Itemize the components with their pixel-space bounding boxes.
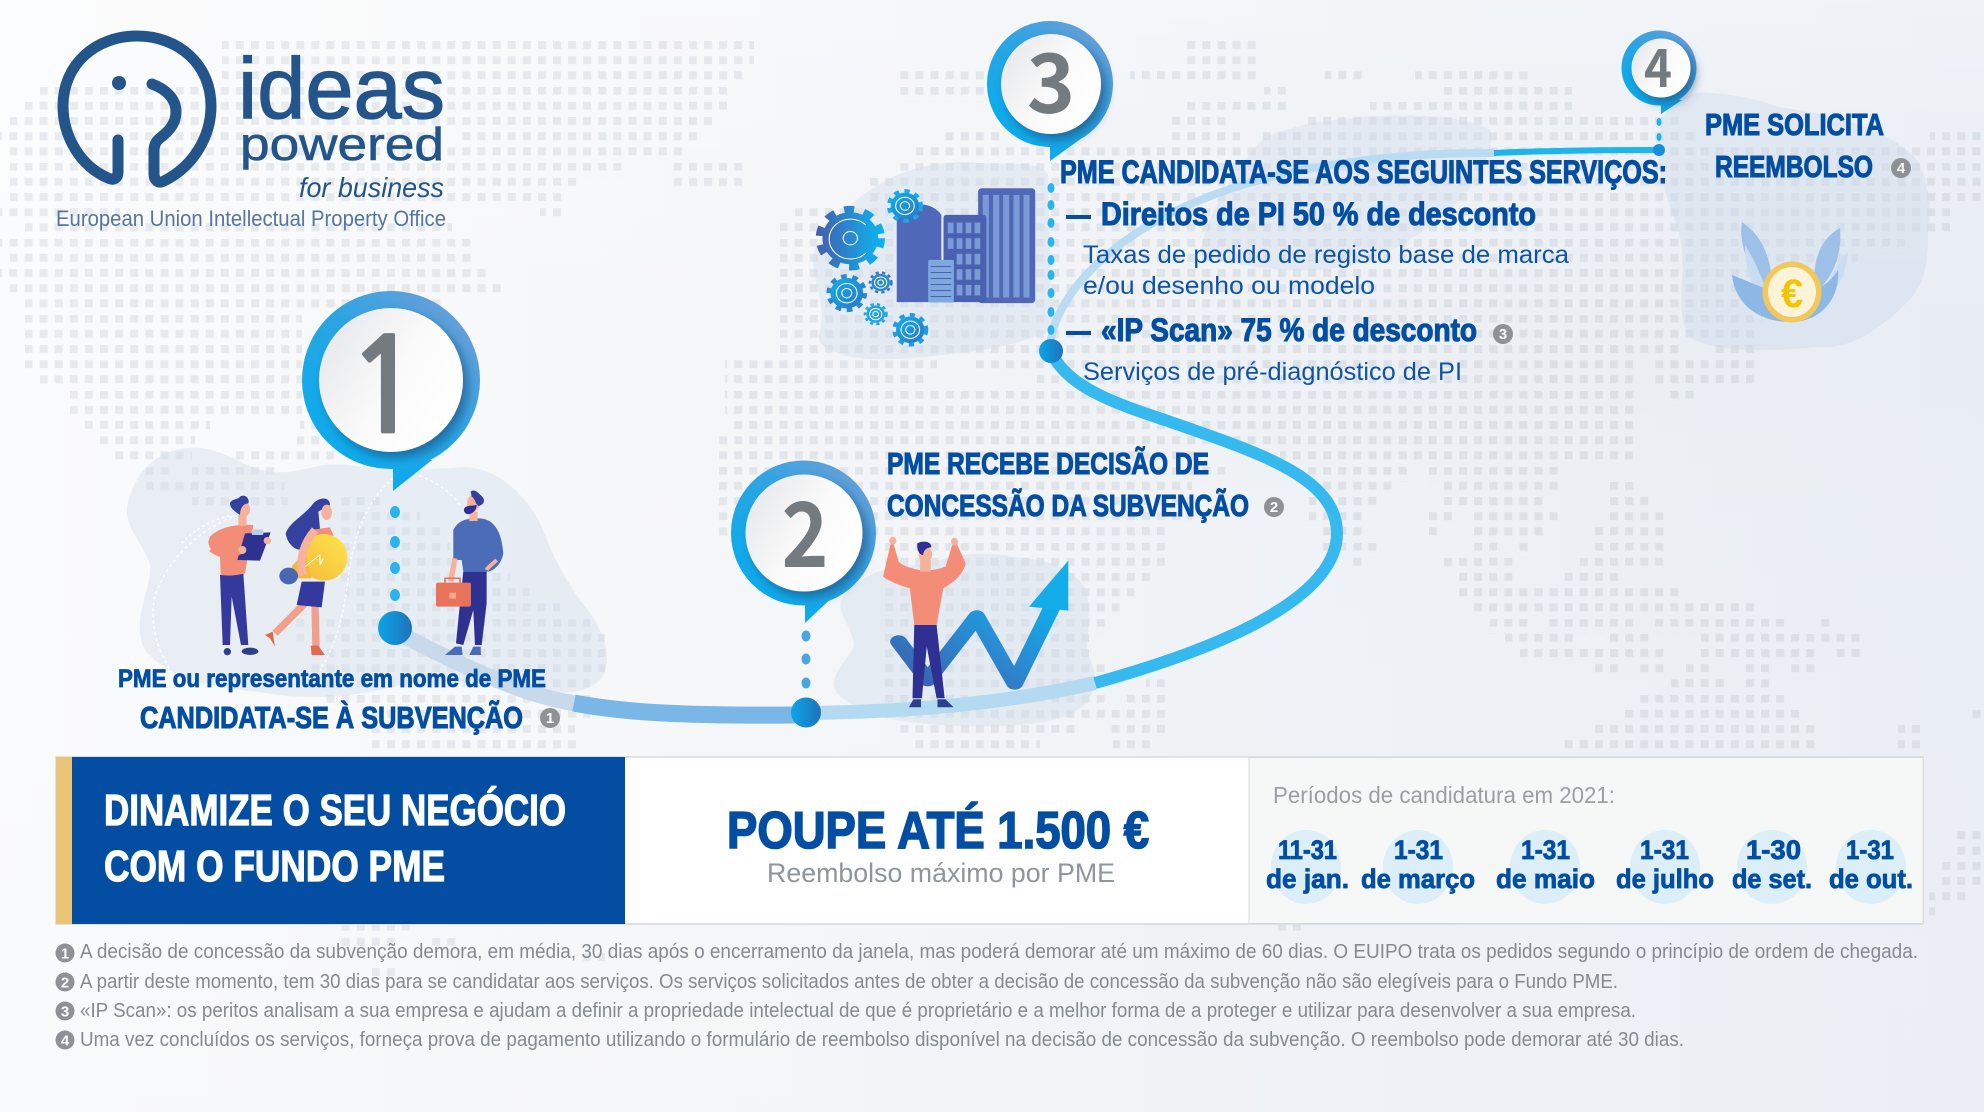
footnotes (56, 941, 1918, 1051)
period: January: 11-31 (1278, 835, 1337, 865)
period: January: de jan. (1266, 864, 1349, 894)
step 1 heading (118, 665, 560, 735)
step 4 dotted connector (1653, 118, 1665, 156)
step 3 dotted connector (1039, 183, 1063, 363)
step 1 pin (302, 291, 480, 491)
footnote 4: Uma vez concluídos os serviços, forneça prova de pagamento utilizando o formulário de reembolso disponível na decisão de concessão da subvenção. O reembolso pode demorar até 30 dias. (80, 1029, 1684, 1051)
period: May (1496, 830, 1595, 904)
organisation name: European Union Intellectual Property Office (56, 206, 446, 231)
period: July: 1-31 (1640, 835, 1689, 865)
step 2 heading: PME RECEBE DECISÃO DE (887, 446, 1209, 481)
period: September (1732, 830, 1812, 904)
illustration: euro coin with leaves: € (1781, 272, 1803, 316)
footnote 1: A decisão de concessão da subvenção demora, em média, 30 dias após o encerramento da janela, mas poderá demorar até um máximo de 60 dias. O EUIPO trata os pedidos segundo o princípio de ordem de chegada. (80, 941, 1918, 963)
savings block (727, 802, 1149, 888)
banner title block: COM O FUNDO PME (104, 842, 445, 891)
step 3 pin (987, 18, 1113, 161)
step 3 pin: 3 (1027, 18, 1075, 137)
step 1 heading: PME ou representante em nome de PME (118, 665, 546, 693)
footnote 2: 2 (61, 974, 69, 992)
illustration: gears and office buildings (819, 188, 1035, 345)
period: January (1266, 830, 1349, 904)
step 3 services text: Serviços de pré-diagnóstico de PI (1083, 358, 1462, 386)
period: May: de maio (1496, 864, 1595, 894)
step 4 heading: REEMBOLSO (1715, 149, 1873, 184)
step 3 services text: 3 (1499, 326, 1507, 343)
step 3 services text: PME CANDIDATA-SE AOS SEGUINTES SERVIÇOS: (1060, 154, 1667, 190)
period: October (1829, 830, 1913, 904)
step 2 heading: 2 (1270, 499, 1278, 516)
step 4 heading: 4 (1897, 160, 1906, 177)
step 2 pin (731, 460, 876, 623)
illustration: euro coin with leaves (1732, 222, 1848, 322)
savings block: POUPE ATÉ 1.500 € (727, 802, 1149, 860)
brand word: for business: for business (299, 172, 444, 203)
step 1 dotted connector (378, 506, 412, 645)
decorative blobs behind illustrations (127, 92, 1930, 727)
footnote 3: 3 (61, 1004, 69, 1020)
period: September: 1-30 (1746, 835, 1801, 865)
period: October: de out. (1829, 864, 1913, 894)
step 4 pin: 4 (1644, 27, 1672, 103)
period: October: 1-31 (1846, 835, 1894, 865)
step 1 heading: 1 (546, 710, 554, 727)
gold accent bar (56, 757, 72, 924)
savings block: Reembolso máximo por PME (767, 858, 1115, 888)
step 2 heading (887, 446, 1284, 523)
logo: ideas powered for business (56, 36, 446, 231)
step 4 heading (1705, 107, 1911, 184)
period: July (1616, 830, 1714, 904)
application periods block: Períodos de candidatura em 2021: (1273, 782, 1615, 808)
application periods block (1249, 758, 1923, 924)
period: March (1361, 830, 1475, 904)
banner panel (56, 757, 1923, 924)
step 4 heading: PME SOLICITA (1705, 107, 1884, 142)
step 4 pin (1622, 27, 1696, 114)
period: September: de set. (1732, 864, 1812, 894)
period: May: 1-31 (1521, 835, 1570, 865)
illustration: man with rising arrow (883, 537, 1068, 707)
period: July: de julho (1616, 864, 1714, 894)
footnote 4: 4 (61, 1032, 70, 1050)
period: March: de março (1361, 864, 1475, 894)
step 3 services text: Direitos de PI 50 % de desconto (1101, 196, 1536, 232)
path curve connecting the steps (406, 150, 1659, 715)
brand word: powered: powered (240, 118, 444, 170)
step 1 pin: 1 (345, 322, 425, 453)
footnote 1: 1 (61, 946, 69, 962)
brand word: ideas: ideas (238, 41, 445, 137)
step 3 services text (1060, 154, 1667, 386)
footnote 3: «IP Scan»: os peritos analisam a sua empresa e ajudam a definir a propriedade intelectual de que é proprietário e a melhor forma de a proteger e utilizar para desenvolver a sua empresa. (80, 1000, 1636, 1022)
banner title block (72, 757, 625, 924)
step 2 dotted connector (791, 630, 821, 728)
period: March: 1-31 (1394, 835, 1443, 865)
banner title block: DINAMIZE O SEU NEGÓCIO (104, 785, 566, 835)
illustration: people with clipboard, light bulb and briefcase (182, 478, 503, 670)
step 2 pin: 2 (782, 463, 828, 593)
step 2 heading: CONCESSÃO DA SUBVENÇÃO (887, 488, 1249, 523)
footnote 2: A partir deste momento, tem 30 dias para se candidatar aos serviços. Os serviços solicitados antes de obter a decisão de concessão da subvenção não são elegíveis para o Fundo PME. (80, 971, 1618, 993)
step 3 services text: Taxas de pedido de registo base de marca (1083, 241, 1569, 269)
dashed outline circles behind people (153, 472, 460, 670)
step 1 heading: CANDIDATA-SE À SUBVENÇÃO (140, 700, 523, 735)
step 3 services text: e/ou desenho ou modelo (1083, 272, 1375, 300)
step 3 services text: «IP Scan» 75 % de desconto (1101, 312, 1477, 348)
icon: ip logo mark (63, 36, 211, 182)
